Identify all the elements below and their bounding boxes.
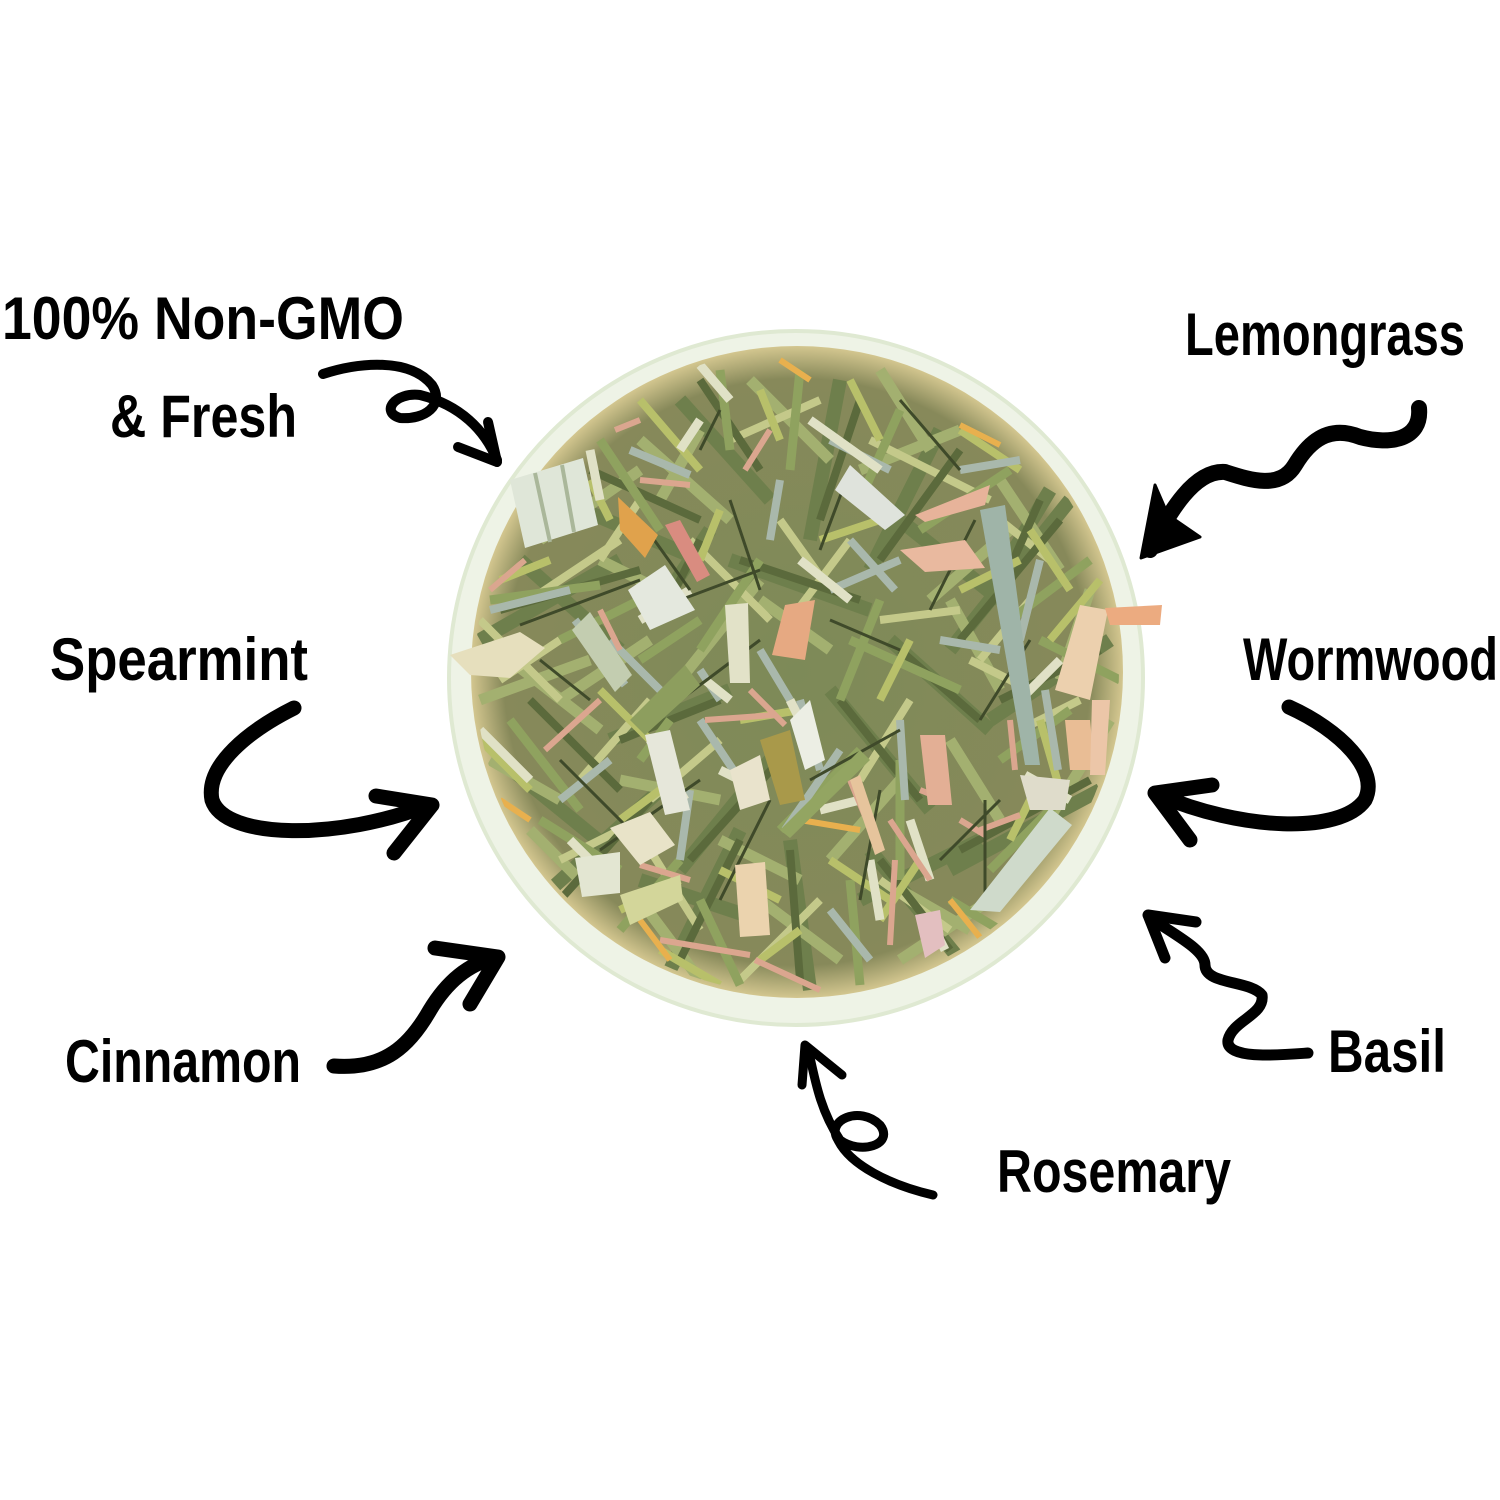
arrow: Rosemary to bowl	[802, 1045, 933, 1195]
label: Basil: Basil	[1328, 1018, 1446, 1085]
infographic canvas	[5, 296, 1495, 1204]
label: 100% Non-GMO & Fresh	[2, 285, 404, 450]
bowl interior	[471, 346, 1123, 998]
arrow: Wormwood to bowl	[1155, 707, 1368, 840]
label: Cinnamon: Cinnamon	[65, 1028, 301, 1095]
bowl with dried herbs	[449, 331, 1162, 1025]
arrow: Basil to bowl	[1148, 915, 1308, 1055]
label: Spearmint: Spearmint	[50, 626, 308, 693]
label: 100% Non-GMO & Fresh: & Fresh	[110, 383, 297, 450]
arrow: Cinnamon to bowl	[334, 948, 498, 1066]
herb blend	[470, 360, 1120, 990]
label: Rosemary: Rosemary	[997, 1138, 1232, 1205]
arrow: Lemongrass to bowl	[1141, 408, 1419, 558]
arrow: Spearmint to bowl	[211, 708, 432, 853]
bowl rim	[449, 331, 1143, 1025]
label: 100% Non-GMO & Fresh: 100% Non-GMO	[2, 285, 404, 352]
arrow: 100% Non-GMO to bowl	[323, 365, 497, 462]
large herb pieces	[450, 458, 1162, 958]
